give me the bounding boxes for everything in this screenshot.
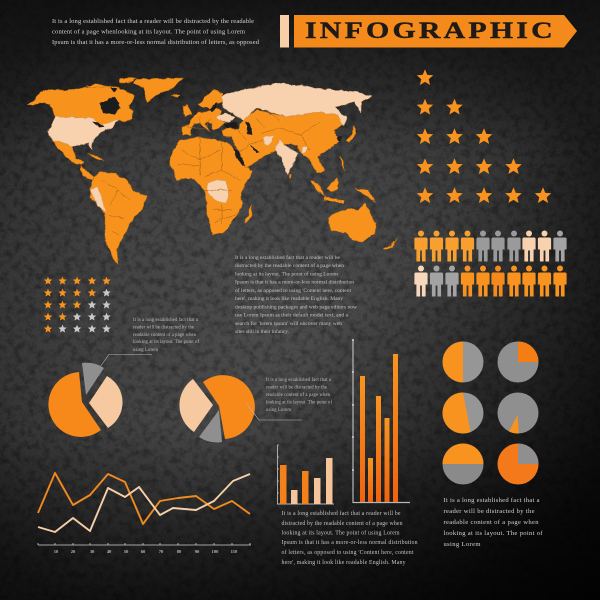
title banner <box>280 15 577 48</box>
central text block: use Lorem Ipsum as their default model text, and a <box>235 312 349 318</box>
x axis labels: 70 <box>159 549 164 554</box>
pie icon 4 <box>498 392 538 434</box>
bottom text block: distracted by the readable content of a page when <box>282 520 403 527</box>
intro text block <box>52 18 260 46</box>
x axis labels: 40 <box>107 549 112 554</box>
bottom text block: of letters, as opposed to using 'Content here, content <box>282 549 414 556</box>
people pictogram row 1 <box>414 230 567 262</box>
right text block: It is a long established fact that a <box>444 497 540 504</box>
x axis labels: 110 <box>231 549 238 554</box>
map: borders <box>102 112 320 235</box>
central text block: desktop publishing packages and web page editors now <box>235 304 357 310</box>
callout text: pie 2: It is a long established fact that a <box>266 378 332 383</box>
pie icon 3 <box>442 392 484 434</box>
right text block: looking at its layout. The point of <box>444 530 543 537</box>
x axis labels: 10 <box>54 549 59 554</box>
x axis labels <box>54 549 238 554</box>
star pyramid <box>417 69 551 203</box>
map: orange countries <box>28 78 397 264</box>
line chart <box>38 473 251 554</box>
callout text: pie 1: reader will be distracted by the <box>133 326 194 330</box>
intro text block: Ipsum is that it has a more-or-less normal distribution of letters, as opposed <box>52 39 260 46</box>
map: cream countries <box>48 83 372 212</box>
callout text: pie 2: readable content of a page when <box>266 393 331 398</box>
callout text: pie 2 <box>266 378 332 413</box>
tall bar chart <box>352 339 410 502</box>
intro text block: It is a long established fact that a reader will be distracted by the readable <box>52 18 254 25</box>
x axis labels: 80 <box>177 549 182 554</box>
x axis labels: 20 <box>71 549 76 554</box>
people pictogram row 2 <box>414 266 567 296</box>
central text block: of letters, as opposed to using 'Content here, content <box>235 287 351 294</box>
central text block: Ipsum is that it has a more-or-less normal distribution <box>235 280 354 286</box>
callout text: pie 1: It is a long established fact that a <box>133 318 199 323</box>
cream data line <box>38 474 250 532</box>
map: water cut-outs <box>92 88 342 166</box>
x axis labels: 90 <box>195 549 200 554</box>
callout text: pie 1: readable content of a page when <box>133 333 197 338</box>
orange data line <box>38 473 250 524</box>
bottom text block: looking at its layout. The point of using Lorem <box>282 530 400 536</box>
small bar chart <box>277 445 334 504</box>
callout text: pie 1: using Lorem <box>133 348 158 353</box>
callout text: pie 2: looking at its layout. The point of <box>266 400 332 406</box>
central text block: looking at its layout. The point of using Lorem <box>235 270 339 278</box>
callout text: pie 2: reader will be distracted by the <box>266 386 327 390</box>
pie icon 6 <box>498 444 538 484</box>
right text block: using Lorem <box>444 541 481 548</box>
central text block: sites still in their infancy. <box>235 328 290 335</box>
central text block: distracted by the readable content of a page when <box>235 262 344 269</box>
bottom text block: It is a long established fact that a reader will be <box>282 510 401 517</box>
callout line: pie 1 <box>100 354 152 367</box>
pie icon 2 <box>498 342 538 382</box>
title: INFOGRAPHIC <box>305 17 553 43</box>
bottom text block <box>282 510 418 566</box>
bottom text block: Ipsum is that it has a more-or-less normal distribution <box>282 540 418 546</box>
right text block: reader will be distracted by the <box>444 508 535 515</box>
callout line: pie 2 <box>246 403 302 420</box>
x axis labels: 100 <box>212 549 219 554</box>
central text block <box>235 254 357 335</box>
world map <box>28 78 397 264</box>
callout text: pie 1 <box>133 318 199 353</box>
pie icon 1 <box>442 342 484 382</box>
central text block: here', making it look like readable English. Many <box>235 296 343 302</box>
bottom text block: here', making it look like readable English. Many <box>282 560 406 566</box>
small star rating grid <box>44 277 111 333</box>
x axis labels: 30 <box>90 549 95 554</box>
pie icon 5 <box>442 444 484 484</box>
central text block: It is a long established fact that a reader will be <box>235 254 341 261</box>
right text block: readable content of a page when <box>444 519 539 526</box>
pie chart 1 <box>48 363 123 437</box>
intro text block: content of a page whenlooking at its layout. The point of using Lorem <box>52 28 245 36</box>
x axis labels: 50 <box>124 549 129 554</box>
callout text: pie 2: using Lorem <box>266 408 291 413</box>
right text block <box>444 497 543 548</box>
central text block: search for 'lorem ipsum' will uncover many web <box>235 320 342 327</box>
x axis <box>38 543 251 545</box>
x axis labels: 60 <box>141 549 146 554</box>
callout text: pie 1: looking at its layout. The point of <box>133 340 199 345</box>
pie chart 2 <box>179 375 255 442</box>
